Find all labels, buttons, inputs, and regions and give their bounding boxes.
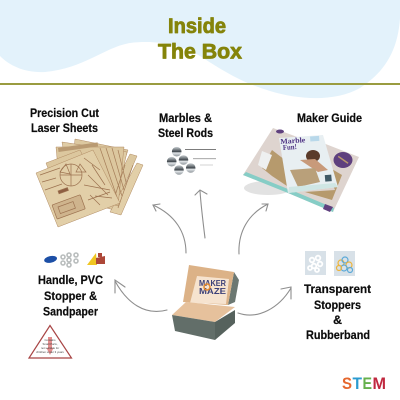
image: maker guide booklet <box>243 128 359 212</box>
heading: transparent stoppers and rubberband: Rubberband <box>306 330 370 342</box>
arrow: to marbles <box>195 190 207 238</box>
icon: choking hazard warning triangle: children under 3 years <box>36 350 64 354</box>
heading: transparent stoppers and rubberband: Transparent <box>304 284 371 296</box>
heading: precision cut laser sheets: Laser Sheets <box>31 123 98 135</box>
image: open product box <box>172 265 239 340</box>
heading: handle, pvc stopper and sandpaper: Handle, PVC <box>38 275 103 287</box>
image: laser cut wooden sheets <box>36 139 143 227</box>
heading: precision cut laser sheets: Precision Cut <box>30 108 99 120</box>
heading: handle, pvc stopper and sandpaper: Stopper & <box>44 291 97 303</box>
heading: marbles and steel rods: Marbles & <box>159 113 212 125</box>
image: maker guide booklet: Marble <box>280 135 306 146</box>
image: rubberband packet <box>334 251 355 276</box>
image: open product box: MAKER <box>199 279 226 288</box>
image: open product box: MAZE <box>199 287 227 296</box>
logo: STEM: M <box>372 375 386 393</box>
logo: STEM: S <box>342 375 352 393</box>
logo: STEM: E <box>362 375 372 393</box>
arrow: to handle and stopper <box>115 280 167 311</box>
image: transparent stopper packet <box>305 251 326 275</box>
logo: STEM <box>342 375 386 393</box>
image: marbles and rods <box>167 147 216 175</box>
heading: marbles and steel rods: Steel Rods <box>158 128 213 140</box>
heading: transparent stoppers and rubberband: Stoppers <box>314 300 361 312</box>
heading: transparent stoppers and rubberband <box>304 284 371 342</box>
arrow: to laser sheets <box>153 204 186 253</box>
background blob <box>0 0 400 98</box>
icon: choking hazard warning triangle: Small Parts, <box>42 342 58 346</box>
heading: marbles and steel rods <box>158 113 213 140</box>
arrow: to maker guide <box>239 204 268 254</box>
heading: maker guide: Maker Guide <box>297 113 362 125</box>
icon: choking hazard warning triangle: not suitable for <box>41 346 59 350</box>
icon: choking hazard warning triangle: Contains <box>44 338 56 342</box>
icon: choking hazard warning triangle <box>29 326 72 358</box>
title <box>158 15 242 64</box>
arrow: to transparent stoppers <box>238 287 291 315</box>
heading: handle, pvc stopper and sandpaper <box>38 275 103 318</box>
heading: handle, pvc stopper and sandpaper: Sandpaper <box>43 306 98 318</box>
image: maker guide booklet: Fun! <box>283 142 297 152</box>
image: handle, stopper and sandpaper parts <box>44 253 105 267</box>
header rule <box>0 83 400 85</box>
title: Inside <box>168 15 226 38</box>
heading: transparent stoppers and rubberband: & <box>333 315 342 327</box>
title: The Box <box>158 40 242 64</box>
logo: STEM: T <box>352 375 362 393</box>
heading: precision cut laser sheets <box>30 108 99 135</box>
